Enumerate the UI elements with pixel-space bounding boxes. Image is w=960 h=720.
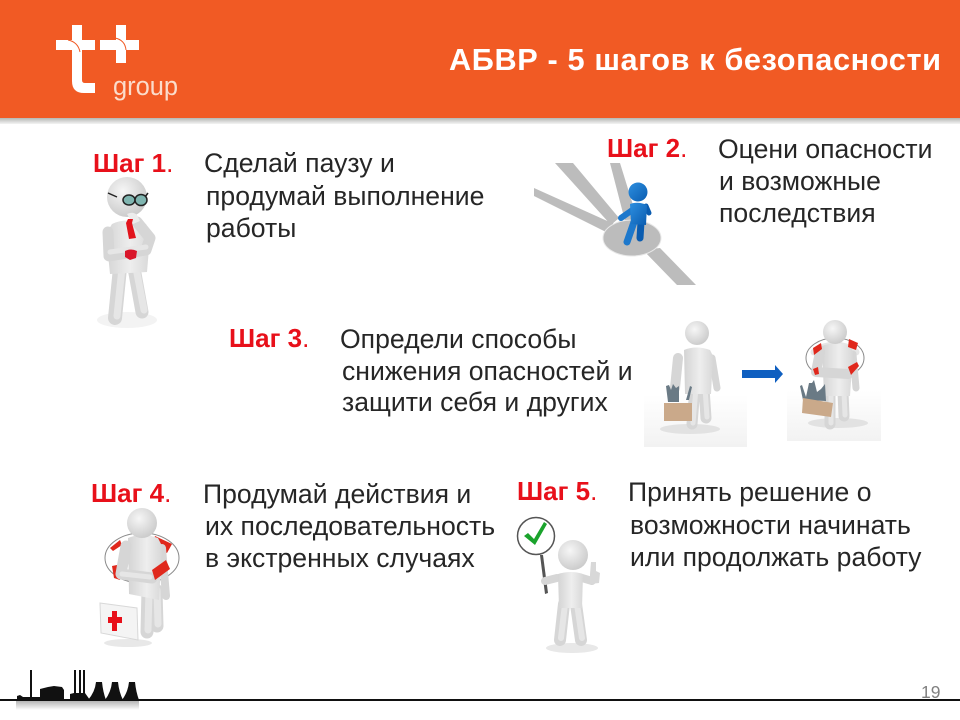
header banner — [0, 0, 960, 118]
step 4 text: Шаг 4. — [91, 478, 171, 508]
icon: crossroads with blue figure — [534, 163, 696, 285]
step 5 text: возможности начинать — [630, 510, 911, 540]
step 2 text: Шаг 2. — [607, 133, 687, 163]
step 4 text: в экстренных случаях — [205, 543, 475, 573]
step 5 text: Принять решение о — [628, 477, 872, 507]
step 1 text: продумай выполнение — [206, 181, 484, 211]
step 4 text: их последовательность — [205, 511, 495, 541]
logo: t+ group — [56, 25, 178, 101]
icon: thinking figure with glasses and red tie — [97, 177, 157, 328]
step 5 text: Шаг 5. — [517, 476, 597, 506]
icon: figure with check mark sign — [518, 518, 600, 653]
arrow — [742, 365, 783, 383]
icon: figure with toolbox — [644, 321, 747, 447]
step 2 text: Оцени опасности — [718, 134, 932, 164]
step 2 text: и возможные — [719, 166, 881, 196]
icon: figure with lifebuoy and first aid case — [100, 508, 179, 647]
step 1 text — [93, 148, 484, 243]
step 2 text: последствия — [719, 198, 876, 228]
step 3 text: Шаг 3. — [229, 323, 309, 353]
step 3 text — [229, 323, 633, 417]
step 2 text — [607, 133, 932, 228]
step 4 text: Продумай действия и — [203, 479, 471, 509]
step 1 text: Шаг 1. — [93, 148, 173, 178]
step 3 text: Определи способы — [340, 324, 576, 354]
title: АБВР - 5 шагов к безопасности — [449, 42, 941, 77]
step 5 text: или продолжать работу — [630, 542, 922, 572]
icon: figure with toolbox and lifebuoy — [787, 320, 881, 441]
logo: t+ group: group — [113, 71, 178, 101]
step 4 text — [91, 478, 495, 573]
icon: power plant silhouette — [16, 670, 139, 710]
step 3 text: снижения опасностей и — [342, 356, 633, 386]
step 3 text: защити себя и других — [342, 387, 608, 417]
step 1 text: работы — [206, 213, 296, 243]
footer line — [0, 699, 960, 701]
step 1 text: Сделай паузу и — [204, 148, 395, 178]
page number: 19 — [921, 682, 940, 702]
step 5 text — [517, 476, 922, 572]
